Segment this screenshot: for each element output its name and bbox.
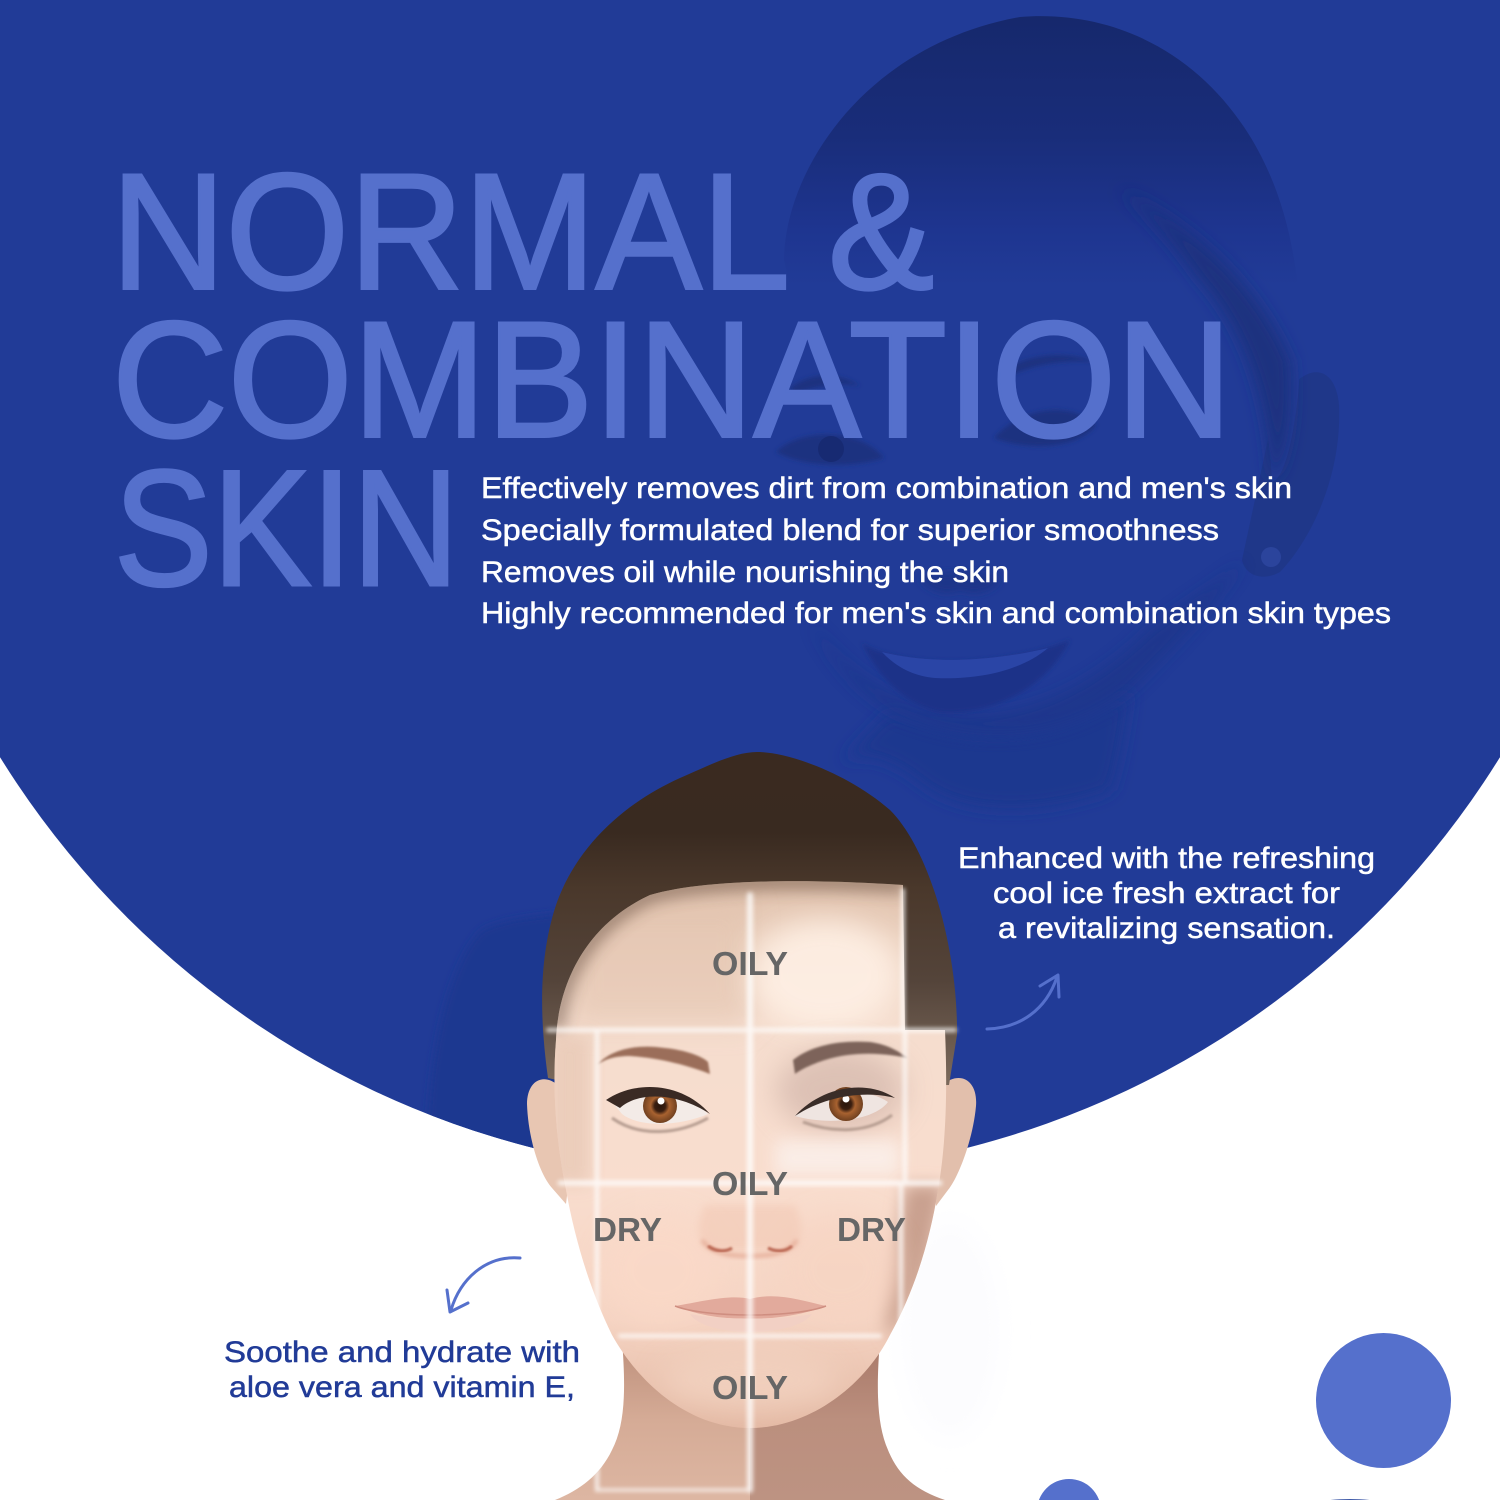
left eye xyxy=(606,1087,710,1132)
face shading xyxy=(550,881,945,1410)
portrait smile xyxy=(862,640,1070,712)
zone label: right cheek: DRY xyxy=(837,1211,906,1248)
callout: refreshing extract: cool ice fresh extract for xyxy=(993,877,1340,910)
heading: COMBINATION xyxy=(112,288,1232,472)
zone label: left cheek: DRY xyxy=(593,1211,662,1248)
nose xyxy=(699,1205,801,1256)
right eye xyxy=(795,1087,895,1130)
blue background circle xyxy=(0,0,1500,1175)
portrait eyes and brows xyxy=(776,355,1096,593)
right socket tone xyxy=(775,1048,905,1132)
left ear xyxy=(527,1079,580,1204)
portrait hair side xyxy=(1158,219,1294,470)
soft hairline xyxy=(556,881,905,1030)
callout: soothe and hydrate: aloe vera and vitamin E, xyxy=(229,1371,575,1404)
benefits text block: Effectively removes dirt from combination and men's skin xyxy=(481,472,1292,505)
lower cheek warm xyxy=(600,1215,720,1325)
face skin xyxy=(554,881,946,1428)
zone label: nose: OILY xyxy=(712,1165,788,1202)
portrait jaw shading xyxy=(956,610,1194,728)
benefits text block xyxy=(481,472,1391,630)
heading: NORMAL & xyxy=(111,140,934,324)
benefits text block: Specially formulated blend for superior smoothness xyxy=(481,514,1219,547)
portrait neck xyxy=(842,690,1130,808)
background portrait of smiling woman in blue tint xyxy=(428,16,1339,1170)
right forehead light xyxy=(750,920,900,1030)
heading: SKIN xyxy=(114,436,459,620)
temple left tone xyxy=(550,1035,590,1185)
chin light xyxy=(675,1367,825,1412)
portrait earring xyxy=(1261,547,1281,567)
left forehead tone xyxy=(570,900,750,1025)
callout: refreshing extract: Enhanced with the refreshing xyxy=(958,842,1375,875)
neck left xyxy=(555,1340,750,1500)
callout: soothe and hydrate: Soothe and hydrate with xyxy=(224,1336,580,1369)
right under-eye light xyxy=(775,1140,900,1176)
decorative circle bottom edge xyxy=(1324,1499,1376,1500)
zone label: forehead: OILY xyxy=(712,945,788,982)
callout: refreshing extract: a revitalizing sensation. xyxy=(998,912,1335,945)
portrait hair xyxy=(784,16,1301,482)
benefits text block: Highly recommended for men's skin and combination skin types xyxy=(481,597,1391,630)
left eyebrow xyxy=(597,1047,710,1074)
right eyebrow xyxy=(793,1042,907,1074)
callout: soothe and hydrate xyxy=(224,1336,580,1404)
neck right xyxy=(750,1340,945,1500)
benefits text block: Removes oil while nourishing the skin xyxy=(481,556,1009,589)
callout: refreshing extract xyxy=(958,842,1375,945)
zone label: chin: OILY xyxy=(712,1369,788,1406)
right ear xyxy=(920,1078,976,1206)
hair xyxy=(542,752,957,1090)
portrait shoulder xyxy=(424,1112,534,1148)
portrait: face with skin zones xyxy=(527,752,976,1500)
lips xyxy=(675,1296,826,1332)
soft halo beside face xyxy=(900,1220,1000,1440)
zone grid lines xyxy=(548,890,955,1490)
heading xyxy=(111,140,1232,620)
portrait ear xyxy=(1242,372,1339,577)
arrow: to refreshing callout xyxy=(987,975,1059,1029)
arrow: to soothing callout xyxy=(447,1258,520,1312)
decorative circle large xyxy=(1316,1333,1451,1468)
right side cheek tone xyxy=(885,1185,945,1340)
decorative circle small xyxy=(1037,1479,1101,1500)
